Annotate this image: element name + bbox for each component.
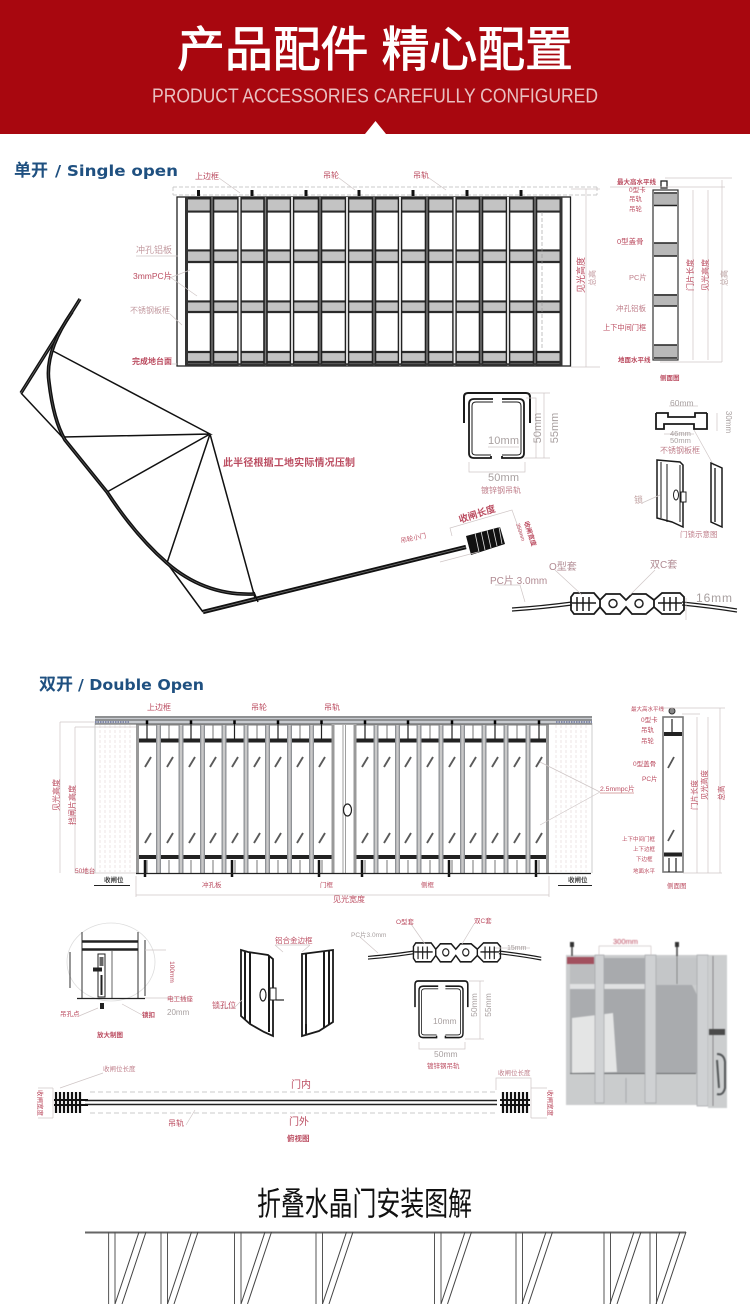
drawing: top-view track plan: 吊轨 (168, 1118, 184, 1128)
drawing: door jamb profile: 46mm (670, 429, 691, 438)
drawing: top-view track plan: 收闸宽度 (36, 1090, 45, 1116)
labels: double open elevation (51, 702, 635, 904)
drawing: second hanging rail profile: 50mm (434, 1049, 458, 1059)
drawing: hanging rail profile: 镀锌钢吊轨 (481, 485, 521, 495)
drawing: door profiles: 锁孔位 (212, 1000, 236, 1010)
drawing: PC sheet seal: 16mm (696, 591, 732, 605)
labels: double open elevation: 收闸位 (568, 875, 588, 884)
labels: single open side section: PC片 (629, 272, 647, 282)
drawing: collector bundle (400, 503, 539, 562)
drawing: second hanging rail profile: 10mm (433, 1016, 457, 1026)
drawing: door jamb profile: 锁 (634, 494, 643, 505)
labels: double open side section: 吊轨 (641, 725, 654, 734)
drawing: PC sheet seal: 双C套 (650, 558, 677, 571)
labels: double open elevation: 吊轮 (251, 702, 267, 712)
drawing: hanging rail profile: 10mm (488, 435, 519, 447)
heading: single open: 单开 (14, 161, 48, 180)
drawing: lock detail circle: 100mm (168, 961, 175, 983)
labels: single open side section: 见光高度 (700, 259, 710, 291)
drawing: collector bundle: 收闸长度 (457, 503, 498, 526)
drawing: door jamb profile: 50mm (670, 436, 691, 445)
drawing: lock detail circle (60, 923, 194, 1039)
labels: double open elevation: 吊轨 (324, 702, 340, 712)
drawing: lock detail circle: 锁扣 (142, 1010, 155, 1019)
labels: double open elevation: 冲孔板 (202, 880, 222, 889)
labels: double open side section: 0型盖骨 (633, 759, 656, 768)
drawing: second hanging rail profile (415, 981, 493, 1070)
diagram: top rail with fold lines (85, 1232, 686, 1304)
drawing: lock detail circle: 电工插座 (167, 994, 194, 1003)
labels: single open side section (603, 177, 729, 382)
drawing: lock detail circle: 放大制图 (97, 1030, 124, 1039)
labels: double open side section: PC片 (642, 774, 658, 783)
drawing: top-view track plan: 门内 (291, 1078, 311, 1091)
labels: double open elevation: 2.5mmpc片 (600, 784, 635, 793)
labels: single open side section: 冲孔铝板 (616, 303, 646, 313)
drawing: collector bundle: 收闸宽度 (522, 520, 539, 548)
labels: single open side section: 地面水平线 (618, 355, 651, 364)
labels: single open elevation: 完成地台面 (132, 356, 172, 366)
drawing: second hanging rail profile: 55mm (483, 993, 493, 1017)
labels: single open elevation: 不锈钢板框 (130, 305, 170, 315)
drawing: door jamb profile: 30mm (724, 411, 733, 433)
header subtitle: PRODUCT ACCESSORIES CAREFULLY CONFIGURED (152, 84, 598, 108)
heading: single open: / Single open (55, 162, 178, 180)
drawing: top-view track plan (36, 1064, 555, 1143)
labels: double open side section: 0型卡 (641, 715, 658, 724)
drawing: top-view track plan: 收闸位长度 (103, 1064, 136, 1073)
labels: double open side section: 总高 (716, 785, 726, 800)
drawing: top-view track plan: 俯视图 (287, 1133, 310, 1143)
header title: 产品配件 精心配置 (177, 24, 573, 77)
labels: double open side section: 侧面图 (667, 881, 686, 890)
labels: single open elevation: 吊轨 (413, 170, 429, 180)
labels: single open side section: 吊轮 (629, 204, 642, 213)
labels: double open elevation: 50地台 (75, 866, 95, 875)
drawing: second PC sheet seal (351, 916, 541, 962)
drawing: door profiles: 铝合金边框 (275, 935, 313, 945)
labels: double open side section: 下边框 (636, 855, 653, 863)
labels: double open elevation: 挡闸片高度 (67, 785, 77, 825)
drawing: PC sheet seal: O型套 (549, 560, 577, 573)
drawing: collector bundle: 吊轮小门 (400, 531, 427, 545)
labels: double open elevation: 侧框 (421, 880, 434, 889)
labels: double open elevation: 门框 (320, 880, 334, 889)
heading: double open: / Double Open (78, 676, 204, 694)
drawing: double open side section (660, 708, 725, 873)
labels: single open elevation: 冲孔铝板 (136, 244, 172, 255)
labels: double open elevation: 收闸位 (104, 875, 124, 884)
drawing: door jamb profile: 不锈钢板框 (660, 445, 700, 455)
labels: single open side section: 门片长度 (685, 259, 695, 291)
drawing: door profiles (212, 935, 333, 1036)
labels: single open side section: 吊轨 (629, 194, 642, 203)
labels: double open side section: 吊轮 (641, 736, 654, 745)
drawing: single open side section (610, 178, 732, 362)
labels: single open side section: 上下中间门框 (603, 323, 646, 332)
drawing: top-view track plan: 门外 (289, 1115, 309, 1128)
heading: double open: 双开 (39, 675, 73, 694)
panel: installation diagram (85, 1187, 686, 1304)
drawing: PC sheet seal (490, 558, 737, 620)
drawing: double open door elevation (60, 716, 634, 897)
labels: single open elevation: 吊轮 (323, 170, 339, 180)
drawing: door jamb profile: 门锁示意图 (680, 529, 718, 539)
labels: double open elevation: 上边框 (147, 702, 171, 712)
labels: single open elevation: 上边框 (195, 171, 219, 181)
labels: double open elevation: 见光宽度 (333, 894, 365, 904)
labels: double open elevation: 见光高度 (51, 779, 61, 811)
image: folding door photo (566, 937, 727, 1108)
labels: single open side section: 侧面图 (660, 373, 680, 382)
drawing: hanging rail profile: 50mm (488, 472, 519, 484)
drawing: door jamb profile: 60mm (670, 398, 694, 408)
labels: single open side section: 0型盖骨 (617, 236, 644, 246)
label: radius note: 此半径根据工地实际情况压制 (223, 456, 355, 469)
drawing: lock detail circle: 20mm (167, 1008, 190, 1017)
labels: double open side section: 最大高水平线 (631, 705, 665, 713)
panel: double open (36, 675, 727, 1143)
drawing: second PC sheet seal: 双C套 (474, 916, 492, 925)
labels: double open side section: 门片长度 (689, 780, 699, 810)
drawing: second hanging rail profile: 镀锌钢吊轨 (427, 1061, 460, 1070)
labels: single open elevation: 总高 (587, 270, 597, 286)
drawing: lock detail circle: 吊孔点 (60, 1010, 80, 1018)
labels: double open side section: 上下中间门框 (622, 835, 656, 843)
labels: single open elevation (130, 170, 597, 366)
labels: single open elevation: 3mmPC片 (133, 271, 172, 281)
image: folding door photo: 300mm (613, 937, 638, 946)
drawing: hanging rail profile: 55mm (549, 413, 561, 443)
drawing: PC sheet seal: PC片 3.0mm (490, 574, 547, 587)
labels: double open side section: 见光高度 (699, 770, 709, 800)
labels: single open side section: 总高 (719, 270, 729, 286)
labels: single open side section: 最大高水平线 (617, 177, 656, 186)
drawing: door jamb profile (634, 398, 733, 539)
drawing: top-view track plan: 收闸宽度 (546, 1090, 555, 1116)
drawing: second PC sheet seal: O型套 (396, 917, 415, 926)
labels: double open side section (622, 705, 726, 890)
drawing: hanging rail profile: 50mm (532, 413, 544, 443)
labels: double open side section: 上下边框 (633, 845, 656, 853)
drawing: folded fan plan (21, 299, 466, 612)
drawing: collector bundle: 350mm (514, 523, 526, 542)
header banner (0, 0, 750, 134)
drawing: second hanging rail profile: 50mm (469, 993, 479, 1017)
drawing: top-view track plan: 收闸位长度 (498, 1068, 531, 1077)
drawing: second PC sheet seal: 15mm (507, 945, 527, 952)
labels: single open side section: 0型卡 (629, 185, 646, 194)
labels: double open side section: 地面水平 (633, 867, 656, 875)
drawing: hanging rail profile (464, 393, 561, 495)
drawing: second PC sheet seal: PC片3.0mm (351, 930, 386, 939)
notch triangle (365, 121, 386, 134)
heading: installation diagram: 折叠水晶门安装图解 (257, 1187, 472, 1223)
panel: single open (14, 161, 737, 620)
labels: single open elevation: 见光高度 (575, 257, 586, 293)
drawing: single open door elevation (136, 178, 600, 367)
